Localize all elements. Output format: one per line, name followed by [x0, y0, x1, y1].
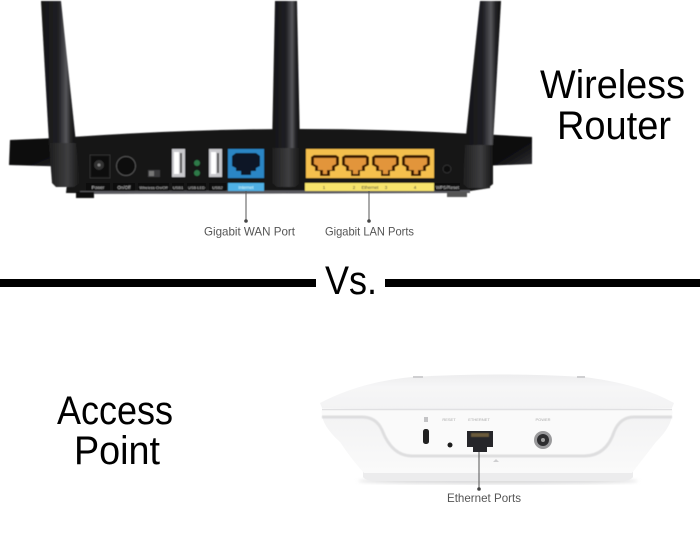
port labels: Power	[92, 185, 105, 190]
USB LEDs	[194, 160, 200, 176]
callout: Ethernet Ports: Ethernet Ports	[447, 491, 521, 505]
left antenna	[41, 1, 80, 187]
base	[363, 470, 633, 481]
small port labels: ETHERNET	[468, 417, 490, 422]
USB port 2	[209, 149, 222, 177]
callout: Ethernet Ports	[447, 452, 521, 505]
dome top	[320, 374, 674, 410]
on/off button	[116, 156, 136, 176]
heading: Wireless Router: Wireless	[540, 63, 685, 107]
reset hole	[448, 442, 452, 448]
small arrow mark	[493, 459, 499, 462]
port labels: USB2	[212, 185, 223, 190]
small port labels: RESET	[442, 417, 456, 422]
callout: Gigabit LAN Ports: Gigabit LAN Ports	[325, 224, 414, 238]
small port labels	[442, 417, 551, 422]
port labels	[86, 183, 460, 191]
WAN port	[228, 149, 264, 178]
callout: Gigabit WAN Port	[204, 191, 296, 238]
power jack	[534, 431, 552, 449]
access point illustration	[320, 374, 674, 484]
power jack	[90, 155, 110, 178]
callout: Gigabit LAN Ports	[325, 191, 414, 238]
port labels: 1	[323, 185, 326, 190]
LAN port block	[306, 149, 434, 178]
divider with Vs.	[0, 259, 700, 303]
soft shadow under base	[358, 478, 638, 484]
small port labels: POWER	[535, 417, 551, 422]
lock icon	[424, 417, 428, 422]
router feet	[76, 192, 467, 198]
router body	[66, 129, 490, 194]
heading: Access Point: Point	[74, 429, 160, 473]
router right wing	[480, 134, 532, 166]
middle antenna	[272, 1, 300, 187]
port labels: WPS/Reset	[436, 185, 460, 190]
lock slot	[423, 429, 429, 444]
callout: Gigabit WAN Port: Gigabit WAN Port	[204, 224, 296, 238]
port labels: USB1	[173, 185, 184, 190]
heading: Access Point: Access	[57, 389, 173, 433]
port labels: 4	[414, 185, 417, 190]
heading: Wireless Router: Router	[557, 104, 671, 148]
port labels: On/Off	[117, 185, 131, 190]
WPS button	[443, 165, 451, 173]
wireless router illustration	[9, 1, 532, 198]
wireless switch	[148, 170, 160, 177]
right antenna	[463, 1, 501, 188]
divider with Vs.: Vs.	[325, 259, 377, 303]
port labels: Internet	[238, 185, 254, 190]
heading: Access Point	[57, 389, 173, 473]
port labels: USB LED	[188, 185, 205, 190]
port labels: Wireless On/Off	[139, 185, 168, 190]
port labels: Ethernet	[361, 185, 379, 190]
port labels: 2	[353, 185, 356, 190]
router left wing	[9, 137, 80, 167]
port labels: 3	[385, 185, 388, 190]
recessed port panel	[322, 410, 672, 456]
top clips	[413, 376, 585, 378]
heading: Wireless Router	[540, 63, 685, 148]
lower shell	[322, 410, 672, 473]
USB port 1	[172, 149, 185, 177]
ethernet port	[467, 431, 493, 452]
